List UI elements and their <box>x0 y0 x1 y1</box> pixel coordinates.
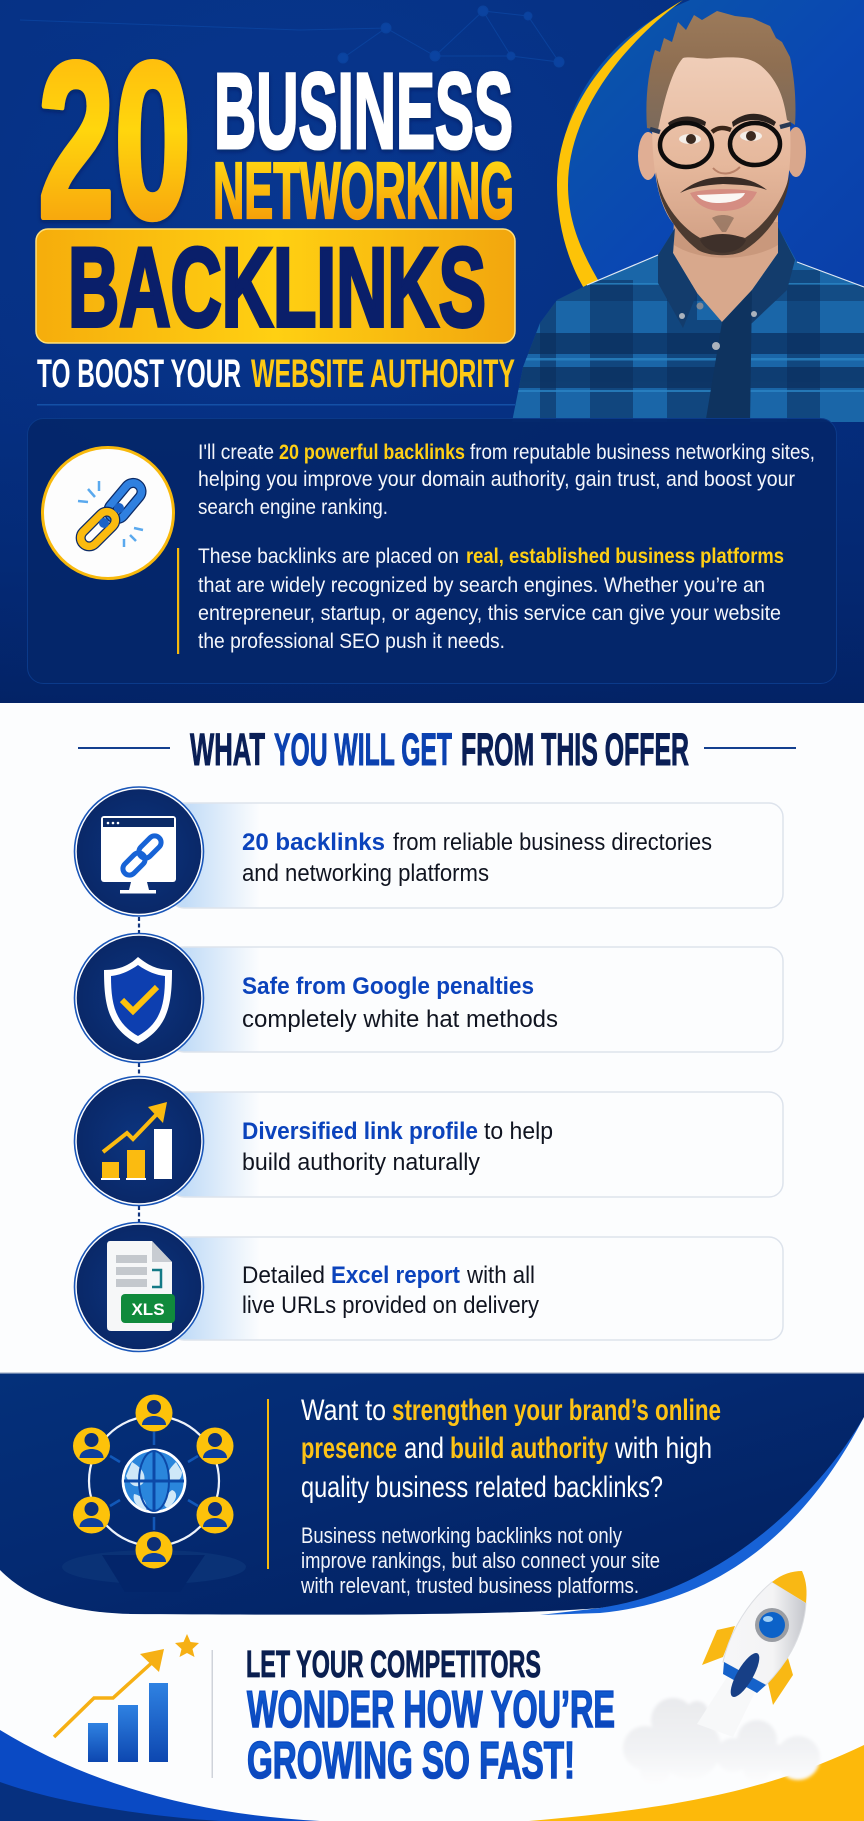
body <box>723 1582 806 1685</box>
heading: what you will get: FROM THIS OFFER <box>461 724 689 775</box>
icon: business network globe <box>62 1394 246 1592</box>
benefit 1: backlinks: from reliable business directories <box>393 829 712 856</box>
eyebrows <box>668 116 706 127</box>
text: CTA question: Want to <box>301 1394 386 1427</box>
benefit 2: safe <box>74 934 783 1062</box>
text: intro paragraph 1: from reputable business networking sites, <box>470 441 815 464</box>
text: intro paragraph 2: that are widely recognized by search engines. Whether you’re an <box>198 574 765 597</box>
text: intro paragraph 2: These backlinks are placed on <box>198 545 459 568</box>
bottom swoosh: yellow <box>529 1745 864 1821</box>
globe <box>123 1450 185 1512</box>
text: CTA supporting copy <box>300 1523 660 1598</box>
panel: intro card <box>28 418 836 684</box>
mustache <box>680 177 767 193</box>
heading: what you will get: WHAT <box>190 724 265 775</box>
text: CTA question: quality business related backlinks? <box>301 1471 663 1504</box>
text: CTA supporting copy: improve rankings, but also connect your site <box>301 1548 660 1573</box>
title: BACKLINKS badge <box>36 225 515 350</box>
icon: growth bars with arrow and star <box>54 1634 199 1762</box>
collar <box>658 228 697 328</box>
connector dashes <box>138 917 140 1222</box>
text: intro paragraph 2: entrepreneur, startup, or agency, this service can give your website <box>198 602 781 625</box>
title: NETWORKING: NETWORKING <box>213 146 514 235</box>
text: intro paragraph 2: real, established business platforms <box>466 545 784 568</box>
benefit 4: excel report <box>74 1222 783 1352</box>
white shoulder edge <box>587 255 864 287</box>
shirt <box>500 220 864 425</box>
network person nodes <box>73 1394 234 1568</box>
heading: what you will get <box>78 724 796 775</box>
beard <box>656 172 790 255</box>
text: CTA supporting copy: Business networking backlinks not only <box>301 1523 622 1548</box>
text: intro paragraph 1: 20 powerful backlinks <box>279 441 465 464</box>
benefit 2: safe: Safe from Google penalties <box>242 973 534 1000</box>
ears <box>638 132 656 180</box>
blue disc behind person <box>562 0 864 300</box>
text: intro paragraph 1: I'll create <box>198 441 274 464</box>
benefit 4: excel report: live URLs provided on delivery <box>242 1292 539 1319</box>
icon: xls file <box>107 1241 175 1331</box>
mouth <box>690 189 757 211</box>
text: intro paragraph 2: the professional SEO push it needs. <box>198 630 505 653</box>
benefit 1: backlinks: and networking platforms <box>242 860 489 887</box>
icon: chain link <box>42 448 174 578</box>
benefit 3: diversified: Diversified link profile <box>242 1118 478 1145</box>
glasses <box>650 123 791 167</box>
fins <box>702 1626 735 1665</box>
text: intro paragraph 1 <box>198 441 815 519</box>
text: intro paragraph 1: search engine ranking. <box>198 496 388 519</box>
text: CTA question <box>301 1394 721 1504</box>
nose <box>713 167 740 174</box>
face <box>652 57 790 238</box>
text: closing slogan <box>246 1644 615 1790</box>
title: BACKLINKS badge: BACKLINKS <box>68 225 486 350</box>
icon: xls file: XLS <box>131 1300 165 1319</box>
text: CTA question: strengthen your brand’s online <box>392 1394 721 1427</box>
smoke clouds <box>623 1698 820 1785</box>
benefit 3: diversified <box>74 1076 783 1206</box>
icon: growth chart <box>101 1102 172 1180</box>
bottom swoosh: blue <box>0 1730 320 1821</box>
benefit 3: diversified: to help <box>484 1118 553 1145</box>
benefit 1: backlinks <box>74 787 783 916</box>
person portrait <box>500 11 864 425</box>
text: CTA supporting copy: with relevant, trusted business platforms. <box>300 1573 639 1598</box>
benefit 4: excel report: Excel report <box>331 1262 460 1289</box>
benefit 4: excel report: Detailed <box>242 1262 325 1289</box>
nose cone <box>772 1571 807 1603</box>
neck <box>673 215 778 322</box>
text: CTA question: and <box>404 1432 444 1465</box>
icon: shield <box>104 957 172 1044</box>
text: closing slogan: LET YOUR COMPETITORS <box>246 1644 541 1686</box>
benefit 4: excel report: with all <box>466 1262 535 1289</box>
thruster band and fin <box>723 1662 766 1693</box>
text: closing slogan: GROWING SO FAST! <box>247 1732 575 1790</box>
benefit 3: diversified: build authority naturally <box>242 1149 480 1176</box>
subtitle: TO BOOST YOUR <box>37 352 241 396</box>
icon: rocket <box>623 1571 820 1785</box>
panel: benefits list <box>74 787 783 1352</box>
title: 20: 20 <box>38 17 191 265</box>
subtitle: WEBSITE AUTHORITY <box>251 352 515 396</box>
yellow arc <box>557 0 683 290</box>
background network pattern <box>20 6 564 67</box>
benefit 1: backlinks: 20 backlinks <box>242 829 385 856</box>
text: CTA question: presence <box>301 1432 397 1465</box>
text: intro paragraph 2 <box>198 545 784 653</box>
panel: hero header <box>0 0 864 703</box>
text: closing slogan: WONDER HOW YOU’RE <box>247 1681 615 1739</box>
text: CTA question: with high <box>614 1432 712 1465</box>
text: CTA question: build authority <box>450 1432 608 1465</box>
window <box>755 1608 789 1642</box>
heading: what you will get: YOU WILL GET <box>274 724 452 775</box>
yellow accent bar <box>177 548 179 654</box>
panel: call-to-action banner <box>0 1372 864 1615</box>
hair <box>646 11 795 130</box>
icon: monitor with link <box>101 816 176 894</box>
eyes <box>679 134 701 144</box>
title: BUSINESS: BUSINESS <box>214 50 513 171</box>
benefit 2: safe: completely white hat methods <box>242 1006 558 1033</box>
text: intro paragraph 1: helping you improve your domain authority, gain trust, and boost your <box>198 468 795 491</box>
